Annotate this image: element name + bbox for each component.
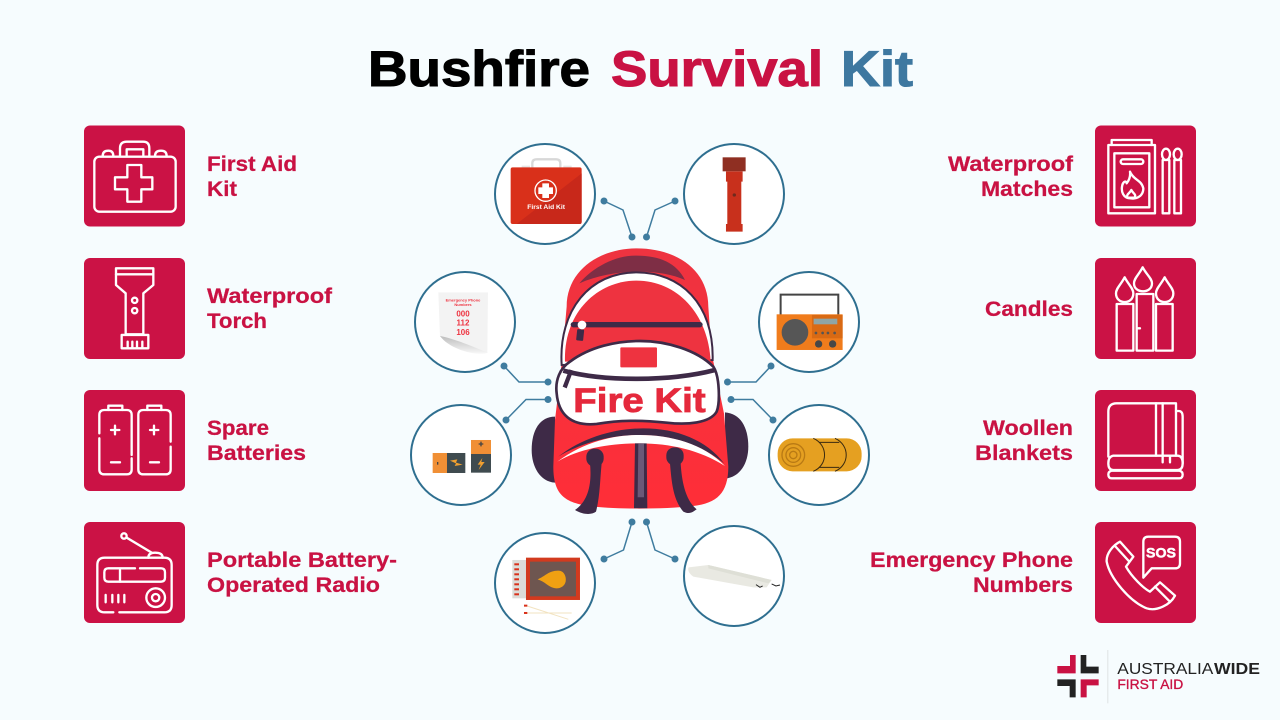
- panel: portable radio item: [84, 522, 397, 623]
- circle: emergency numbers paper: 000: [456, 309, 470, 318]
- label: spare batteries: Batteries: [207, 441, 306, 465]
- backpack label: Fire Kit: [573, 382, 706, 420]
- icon: matches: [1108, 140, 1182, 213]
- panel: emergency phone numbers item: [870, 522, 1196, 623]
- label: emergency phone numbers: [870, 548, 1073, 597]
- backpack illustration: [532, 248, 748, 514]
- label: portable radio: Portable Battery-: [207, 548, 397, 572]
- label: first aid kit: Kit: [207, 177, 237, 201]
- circle: first aid kit: First Aid Kit: [527, 204, 566, 211]
- title: Kit: [841, 41, 913, 97]
- circle: first aid kit: [495, 144, 595, 244]
- circle: emergency numbers paper: 112: [457, 319, 470, 328]
- circle: matches: [495, 533, 595, 633]
- label: woollen blankets: Woollen: [983, 416, 1073, 440]
- icon: torch: [116, 268, 153, 348]
- panel: spare batteries item: [84, 390, 306, 491]
- label: first aid kit: [207, 152, 297, 201]
- label: woollen blankets: Blankets: [975, 441, 1073, 465]
- logo: Australia Wide First Aid: WIDE: [1214, 661, 1260, 678]
- title: [368, 41, 913, 97]
- icon: candles: [1116, 267, 1173, 351]
- label: portable radio: [207, 548, 397, 597]
- panel: waterproof torch item: [84, 258, 333, 359]
- icon: radio: [97, 533, 172, 612]
- circle: emergency numbers paper: Numbers: [454, 302, 472, 307]
- circle: batteries: [411, 405, 511, 505]
- panel: first aid kit item: [84, 126, 297, 226]
- circle: radio: [759, 272, 859, 372]
- label: waterproof torch: Torch: [207, 309, 267, 333]
- logo: Australia Wide First Aid: [1057, 650, 1260, 703]
- label: waterproof matches: [948, 152, 1074, 201]
- panel: woollen blankets item: [975, 390, 1196, 491]
- label: candles: Candles: [985, 297, 1073, 321]
- panel: candles item: [985, 258, 1196, 359]
- circle: emergency numbers paper: [415, 272, 515, 372]
- label: portable radio: Operated Radio: [207, 573, 380, 597]
- label: emergency phone numbers: Emergency Phone: [870, 548, 1073, 572]
- icon: SOS phone: [1107, 537, 1180, 609]
- logo: Australia Wide First Aid: FIRST AID: [1117, 676, 1183, 692]
- label: waterproof matches: Matches: [981, 177, 1073, 201]
- circle: torch: [684, 144, 784, 244]
- label: waterproof torch: [207, 284, 333, 333]
- icon: blanket: [1108, 403, 1183, 478]
- icon: SOS phone: SOS: [1146, 545, 1176, 561]
- label: waterproof torch: Waterproof: [207, 284, 333, 308]
- label: woollen blankets: [975, 416, 1073, 465]
- label: waterproof matches: Waterproof: [948, 152, 1074, 176]
- label: emergency phone numbers: Numbers: [973, 573, 1073, 597]
- label: first aid kit: First Aid: [207, 152, 297, 176]
- icon: batteries: [99, 406, 171, 474]
- icon: first aid kit: [94, 142, 176, 212]
- title: Bushfire: [368, 41, 590, 97]
- label: spare batteries: Spare: [207, 416, 269, 440]
- title: Survival: [611, 41, 823, 97]
- circle: emergency numbers paper: Emergency Phone: [446, 297, 481, 302]
- circle: candles: [684, 526, 784, 626]
- panel: waterproof matches item: [948, 126, 1196, 226]
- connectors: [500, 198, 776, 562]
- logo: Australia Wide First Aid: AUSTRALIA: [1117, 661, 1214, 678]
- circle: rolled blanket: [769, 405, 869, 505]
- label: spare batteries: [207, 416, 306, 465]
- circle: emergency numbers paper: 106: [456, 328, 470, 337]
